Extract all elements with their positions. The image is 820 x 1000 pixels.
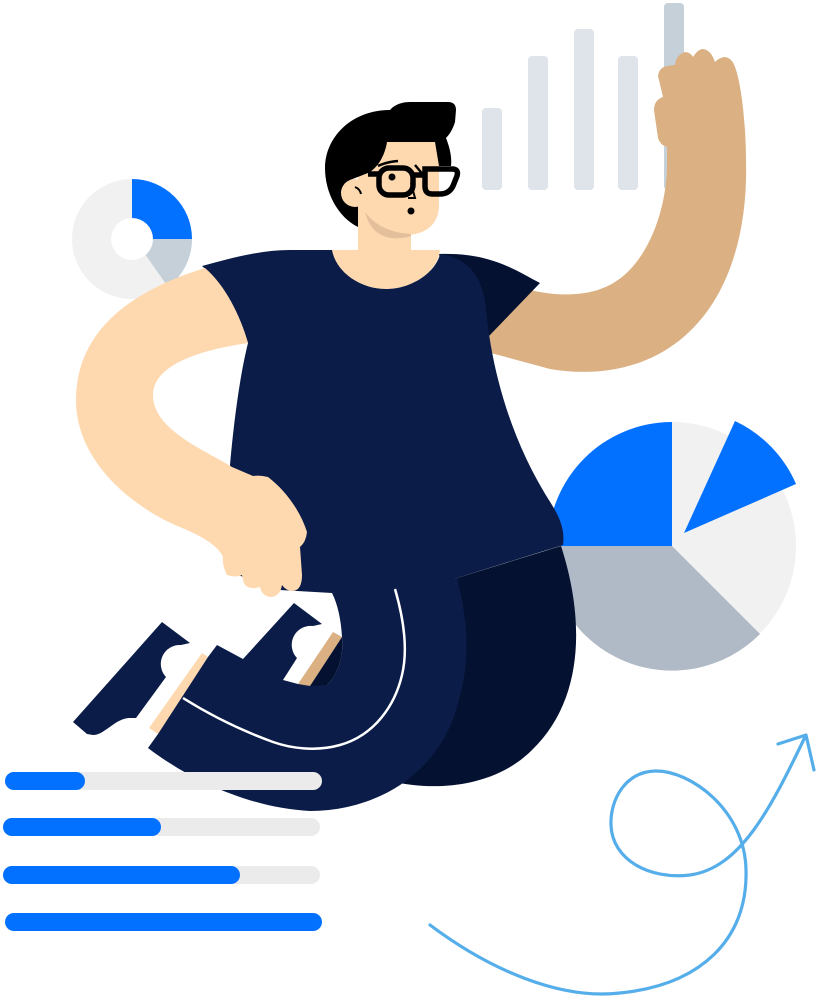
back sock [298, 632, 342, 686]
neck [332, 180, 440, 289]
front sock [149, 653, 208, 734]
front shoe [73, 622, 190, 735]
back ankle shadow [310, 637, 342, 686]
progress bars [3, 772, 322, 931]
nose [408, 183, 415, 198]
eyebrows [378, 161, 425, 177]
ear detail [355, 187, 361, 194]
back leg [395, 546, 576, 786]
leg seam [183, 589, 405, 749]
torso shirt [202, 250, 563, 593]
jaw shadow [365, 212, 411, 238]
eye [388, 174, 396, 180]
mouth [408, 208, 414, 214]
ear [341, 179, 369, 207]
pie chart [548, 421, 796, 671]
legs and shoes [73, 578, 466, 811]
bar chart [482, 3, 684, 190]
donut chart [72, 179, 192, 299]
hair [325, 102, 456, 227]
face [358, 142, 439, 235]
lowered arm and hand [76, 268, 307, 597]
front pant leg [148, 578, 466, 811]
far sleeve [438, 254, 540, 336]
glasses [368, 168, 457, 195]
arrow: looping upward [430, 735, 814, 994]
head [325, 102, 457, 238]
raised arm and hand [480, 49, 746, 372]
